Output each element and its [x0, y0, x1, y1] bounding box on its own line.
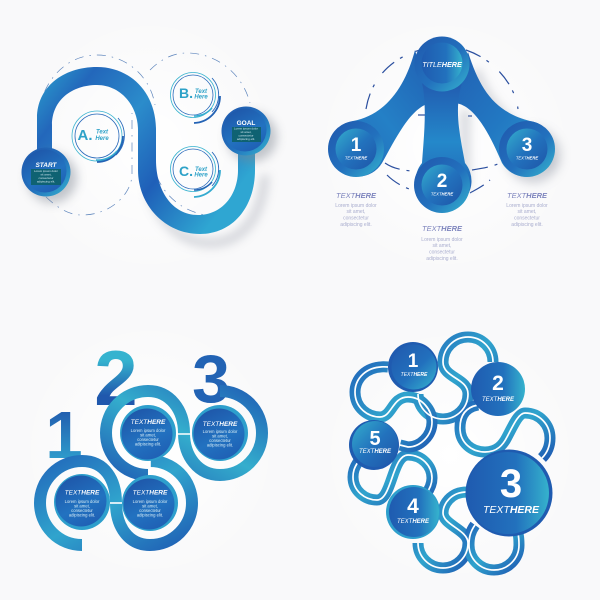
numeral 3: 3: [192, 341, 230, 417]
ribbon white channels: [353, 337, 550, 570]
node: title: TITLEHERE: [422, 60, 462, 69]
caption: 1: sit amet,: [347, 209, 365, 215]
node: lower left: [54, 474, 110, 530]
panel: title with three branches: [328, 36, 561, 262]
node: 3: [466, 450, 552, 536]
caption: 3: TEXTHERE: [507, 191, 548, 200]
node: lower left: consectetur: [71, 508, 93, 513]
node: start: adipiscing elit.: [37, 180, 55, 184]
node: 3: 3: [500, 462, 522, 506]
node: 2: 2: [437, 171, 447, 192]
caption: 1: Lorem ipsum dolor: [335, 203, 377, 209]
node: 1: 1: [408, 351, 419, 372]
node: 5: [349, 420, 399, 470]
ribbons: [353, 337, 550, 570]
badge: B: Text: [195, 89, 208, 95]
node: 5: 5: [369, 428, 381, 450]
joint ticks: [109, 434, 192, 503]
node: lower left: sit amet,: [74, 504, 90, 508]
caption: 2: adipiscing elit.: [426, 256, 458, 262]
node: upper right: consectetur: [209, 438, 231, 443]
node: 2: [471, 362, 525, 416]
node: 2: TEXTHERE: [482, 397, 515, 403]
caption: 2: consectetur: [429, 250, 455, 256]
node: lower right: sit amet,: [142, 504, 158, 508]
node: upper left: TEXTHERE: [131, 419, 166, 426]
dashed guide arcs: [38, 53, 250, 215]
node: upper left: consectetur: [137, 437, 159, 442]
caption: 1: [335, 191, 377, 228]
numeral 2: 2: [94, 334, 138, 422]
arm: right: [455, 52, 554, 177]
badge: A: Here: [95, 136, 109, 142]
badge: B: B.: [179, 85, 193, 101]
node: 5: TEXTHERE: [359, 449, 392, 455]
node: 1: TEXTHERE: [401, 372, 428, 378]
node: 3: TEXTHERE: [483, 504, 540, 516]
node: upper left: adipiscing elit.: [135, 442, 161, 446]
badge: B: Here: [194, 94, 208, 100]
badge: C: Text: [195, 167, 208, 173]
panel: five step ring: [349, 337, 552, 570]
caption: 3: [506, 191, 548, 228]
node: upper right: [192, 405, 248, 461]
node: 3: [499, 121, 555, 177]
node: 2: 2: [492, 372, 504, 395]
badge: C: C.: [179, 163, 193, 179]
node: upper right: sit amet,: [212, 434, 228, 438]
badge: A: [72, 111, 124, 162]
node: 2: TEXTHERE: [431, 192, 453, 196]
road ribbon: [37, 67, 255, 234]
node: 1: TEXTHERE: [345, 156, 367, 160]
caption: 3: consectetur: [514, 216, 540, 222]
node: upper right: Lorem ipsum dolor: [203, 429, 238, 434]
badge: C: [170, 146, 220, 197]
node: 1: [388, 342, 438, 392]
node: start: [22, 148, 77, 203]
node: goal: consectetur: [239, 134, 254, 138]
node: upper right: adipiscing elit.: [207, 442, 233, 448]
node: lower right: [122, 475, 178, 531]
node: goal: [222, 106, 277, 162]
dashed circle arcs: [366, 50, 518, 193]
caption: 2: TEXTHERE: [422, 224, 463, 233]
node: 3: 3: [522, 135, 532, 156]
node: 1: 1: [351, 135, 362, 156]
caption: 2: sit amet,: [433, 243, 451, 249]
node: title: [414, 36, 470, 92]
numeral 1: 1: [45, 398, 83, 473]
road shadow: [150, 175, 265, 243]
caption: 1: adipiscing elit.: [340, 222, 372, 228]
node: upper left: [120, 405, 176, 461]
node: lower left: Lorem ipsum dolor: [65, 499, 100, 504]
branches shadow: [465, 70, 550, 190]
node: 4: 4: [407, 495, 419, 518]
badge: A: Text: [96, 130, 109, 136]
node: goal: Lorem ipsum dolor: [234, 126, 258, 130]
node: lower right: TEXTHERE: [133, 490, 168, 496]
arm: center: [416, 75, 472, 209]
caption: 3: adipiscing elit.: [511, 222, 543, 228]
panel: 1 2 3 spirals: [40, 334, 262, 545]
arm: left: [330, 50, 430, 177]
spiral ribbon: upper: [106, 391, 262, 475]
node: 2: [414, 157, 470, 213]
caption: 2: [421, 224, 463, 262]
node: lower right: consectetur: [139, 508, 161, 513]
badge: B: [170, 72, 220, 123]
node: 3: TEXTHERE: [516, 156, 538, 160]
node: upper left: Lorem ipsum dolor: [131, 428, 166, 433]
node: goal: GOAL: [237, 120, 255, 127]
node: start: Lorem ipsum dolor: [34, 169, 58, 173]
node: upper left: sit amet,: [140, 432, 156, 438]
node: lower right: adipiscing elit.: [137, 512, 163, 518]
caption: 3: sit amet,: [518, 209, 536, 215]
node: 4: [386, 485, 440, 539]
node: 4: TEXTHERE: [397, 519, 430, 525]
caption: 3: Lorem ipsum dolor: [506, 203, 548, 209]
caption: 1: TEXTHERE: [336, 191, 377, 200]
node: lower right: Lorem ipsum dolor: [133, 499, 168, 504]
node: start: START: [35, 162, 58, 169]
panel: start to goal road: [22, 53, 277, 243]
node: start: sit amet,: [41, 172, 52, 176]
node: goal: sit amet,: [241, 130, 252, 134]
node: lower left: adipiscing elit.: [69, 512, 95, 518]
badge: C: Here: [194, 172, 208, 178]
badge: A: A.: [78, 127, 92, 144]
caption: 1: consectetur: [343, 216, 369, 222]
caption: 2: Lorem ipsum dolor: [421, 237, 463, 243]
spiral ribbon: lower: [40, 461, 192, 545]
node: upper right: TEXTHERE: [203, 421, 238, 428]
node: lower left: TEXTHERE: [65, 490, 100, 496]
node: goal: adipiscing elit.: [237, 137, 255, 141]
node: start: consectetur: [39, 176, 54, 180]
node: 1: [328, 121, 384, 177]
